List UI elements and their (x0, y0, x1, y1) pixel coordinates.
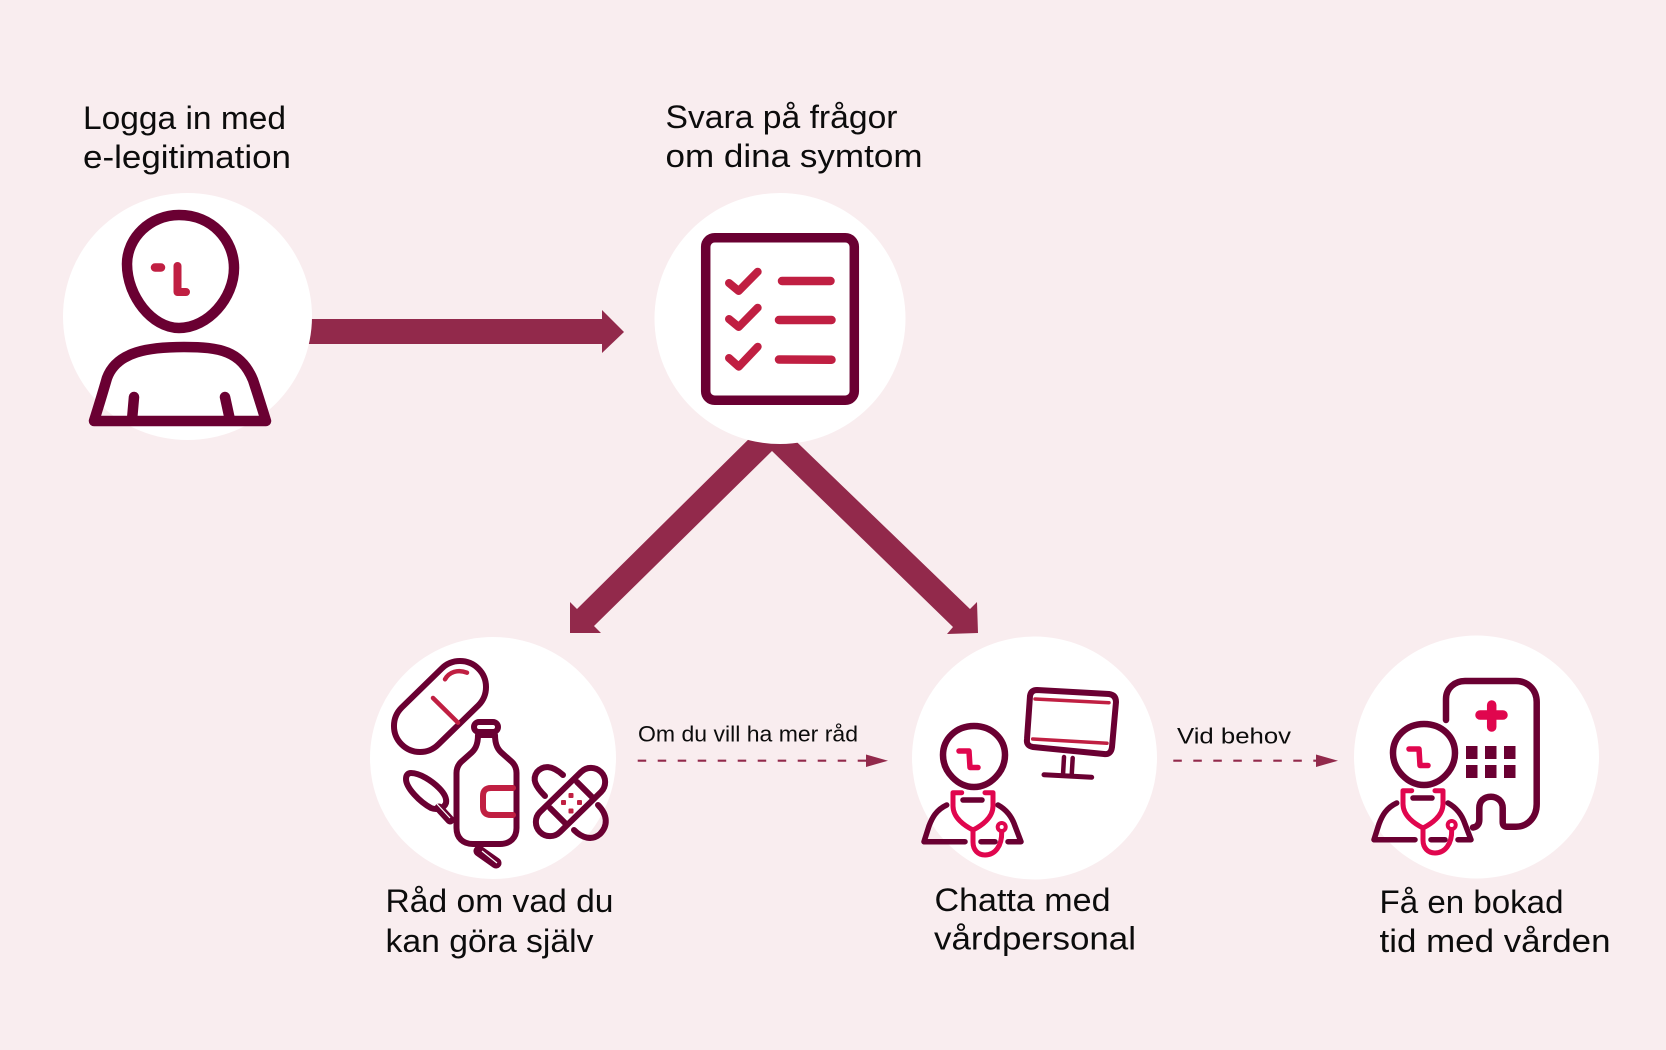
circle: booked appointment (1354, 636, 1599, 878)
dashed arrow: advice to chat (638, 754, 888, 767)
heading: advice: kan göra själv (386, 923, 594, 959)
icon: person (94, 215, 266, 421)
heading: booked appointment (1380, 884, 1610, 959)
dashed arrow: chat to appointment (1173, 754, 1338, 767)
circle: advice (370, 637, 616, 879)
heading: chat: Chatta med (934, 882, 1110, 918)
heading: booked appointment: tid med vården (1380, 923, 1610, 959)
heading: chat (934, 882, 1136, 956)
icon: hospital (1446, 681, 1537, 828)
heading: login (83, 100, 291, 175)
spoon (406, 773, 497, 863)
icon: medicines and bandage (394, 661, 606, 863)
arrow: questions to chat (765, 421, 978, 634)
bottle (456, 722, 516, 844)
icon: doctor with stethoscope (924, 726, 1021, 855)
circle: login (63, 193, 312, 440)
heading: login: Logga in med (83, 100, 286, 136)
label: if you want more advice: Om du vill ha mer råd (638, 722, 858, 746)
circle: questions (654, 193, 906, 444)
heading: advice: Råd om vad du (386, 883, 614, 919)
heading: chat: vårdpersonal (934, 920, 1136, 956)
arrow: questions to self-care advice (570, 421, 780, 633)
heading: login: e-legitimation (83, 139, 291, 175)
bandage (535, 767, 606, 838)
pill (394, 661, 486, 752)
heading: questions: Svara på frågor (666, 99, 898, 135)
heading: questions (666, 99, 922, 174)
arrow: login to questions (300, 310, 624, 353)
label: if needed: Vid behov (1177, 724, 1291, 748)
icon: monitor (1027, 690, 1116, 777)
heading: questions: om dina symtom (666, 138, 922, 174)
icon: doctor at hospital (1374, 724, 1471, 853)
heading: advice (386, 883, 614, 959)
icon: checklist (706, 238, 854, 400)
circle: chat (912, 636, 1157, 880)
heading: booked appointment: Få en bokad (1380, 884, 1564, 920)
